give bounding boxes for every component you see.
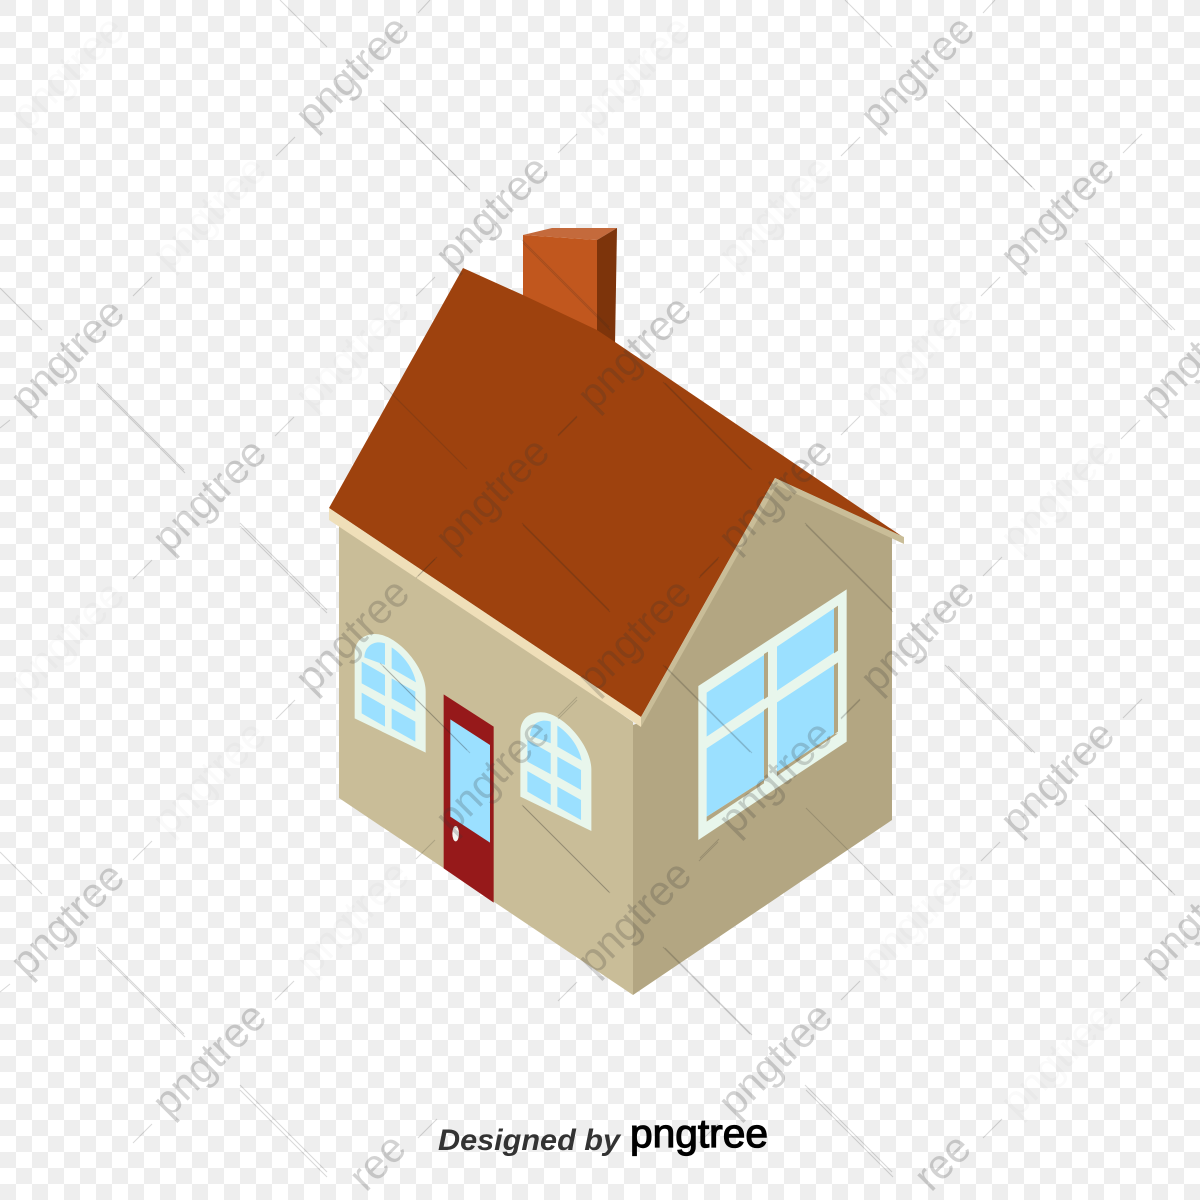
faint background watermarks: pngtree	[990, 992, 1123, 1125]
roof	[329, 268, 903, 717]
repeating pngtree watermarks: pngtree	[850, 568, 983, 701]
repeating pngtree watermarks: pngtree	[708, 710, 841, 843]
repeating pngtree watermarks: pngtree	[708, 992, 841, 1125]
faint background watermarks: pngtree	[0, 570, 133, 703]
left wall	[339, 520, 633, 995]
large side window	[698, 589, 847, 840]
faint background watermarks: pngtree	[990, 427, 1123, 560]
repeating pngtree watermarks: pngtree	[142, 428, 275, 561]
faint background watermarks: pngtree	[142, 145, 275, 278]
faint background watermarks: pngtree	[0, 5, 133, 138]
faint background watermarks: pngtree	[567, 5, 700, 138]
chimney	[523, 228, 617, 345]
door knob	[452, 826, 459, 841]
left arched window	[355, 634, 426, 753]
repeating pngtree watermarks: pngtree	[142, 992, 275, 1125]
faint background watermarks: pngtree	[708, 145, 841, 278]
gable eave trim	[641, 478, 904, 727]
repeating pngtree watermarks: pngtree	[990, 710, 1123, 843]
faint background watermarks: pngtree	[285, 285, 418, 418]
repeating pngtree watermarks: pngtree	[850, 5, 983, 138]
repeating pngtree watermarks: pngtree	[285, 5, 418, 138]
repeating pngtree watermarks: pngtree	[425, 145, 558, 278]
repeating pngtree watermarks: ree	[904, 1124, 980, 1199]
repeating pngtree watermarks: pngtree	[425, 708, 558, 841]
right arched window	[520, 712, 591, 831]
faint background watermarks: pngtree	[850, 850, 983, 983]
repeating pngtree watermarks: ree	[339, 1124, 415, 1199]
faint background watermarks: pngtree	[850, 285, 983, 418]
front door	[444, 694, 494, 903]
repeating pngtree watermarks: pngtree	[0, 288, 133, 421]
designed by credit: Designed by	[438, 1124, 621, 1157]
door glass	[450, 719, 490, 843]
repeating pngtree watermarks: pngtree	[567, 568, 700, 701]
faint background watermarks: pngtree	[285, 850, 418, 983]
faint background watermarks: pngtree	[142, 710, 275, 843]
repeating pngtree watermarks: pngtree	[567, 285, 700, 418]
repeating pngtree watermarks: pngtree	[990, 145, 1123, 278]
right wall	[633, 482, 892, 995]
repeating pngtree watermarks: pngtree	[708, 427, 841, 560]
repeating pngtree watermarks: pngtree	[425, 427, 558, 560]
repeating pngtree watermarks: pngtree	[567, 850, 700, 983]
repeating pngtree watermarks: pngtree	[0, 852, 133, 985]
repeating pngtree watermarks: pngtree	[285, 568, 418, 701]
pngtree logo text: pngtree	[630, 1112, 768, 1156]
left eave trim	[329, 508, 641, 727]
isometric house	[329, 228, 904, 995]
